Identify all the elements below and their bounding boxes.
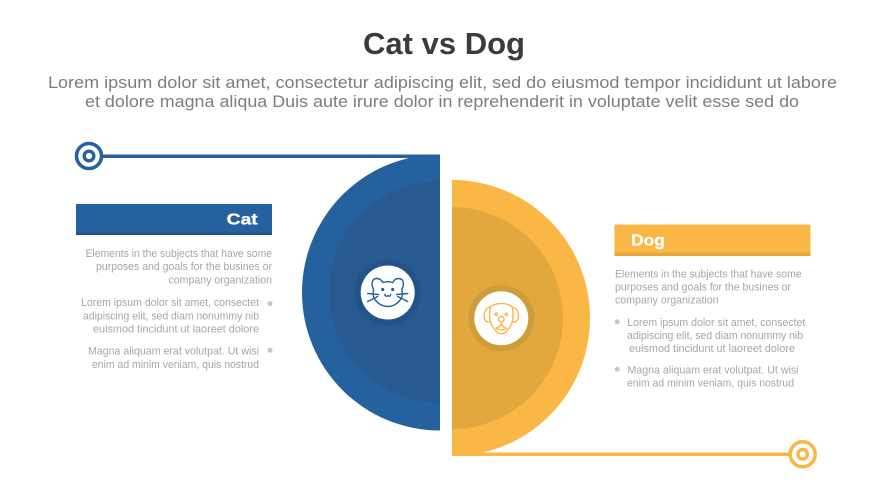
cat description: Elements in the subjects that have some: [86, 248, 272, 260]
cat description: purposes and goals for the busines or: [96, 261, 272, 273]
dog bullet 1: [615, 317, 805, 355]
dog half circle: [452, 180, 590, 456]
dog description: Elements in the subjects that have some: [615, 268, 802, 280]
cat header bar: Cat: [227, 212, 259, 228]
dog bullet 2: enim ad minim veniam, quis nostrud: [627, 378, 794, 390]
icon: cat: [355, 260, 421, 326]
cat half circle: [302, 154, 440, 430]
dog bullet 1: euismod tincidunt ut laoreet dolore: [629, 343, 795, 355]
subtitle: et dolore magna aliqua Duis aute irure dolor in reprehenderit in voluptate velit esse sed do: [85, 93, 799, 111]
dog header bar: Dog: [631, 232, 665, 250]
connector: dog line and target: [452, 442, 815, 467]
dog description: [615, 268, 802, 306]
cat bullet 2: Magna aliquam erat volutpat. Ut wisi: [88, 346, 259, 358]
connector: cat line and target: [76, 144, 440, 168]
dog description: company organization: [615, 294, 718, 306]
cat description: company organization: [168, 274, 272, 286]
cat description: [86, 248, 272, 286]
subtitle: Lorem ipsum dolor sit amet, consectetur adipiscing elit, sed do eiusmod tempor incididunt ut labore: [48, 74, 837, 92]
dog bullet 2: Magna aliquam erat volutpat. Ut wisi: [628, 364, 798, 376]
dog bullet 1: Lorem ipsum dolor sit amet, consectet: [627, 317, 805, 329]
dog bullet 1: adipiscing elit, sed diam nonummy nib: [627, 330, 803, 342]
cat bullet 1: adipiscing elit, sed diam nonummy nib: [83, 310, 259, 322]
subtitle: [48, 74, 837, 111]
dog header bar: [614, 224, 810, 256]
title: Cat vs Dog: [363, 26, 525, 61]
dog bullet 2: [615, 364, 798, 390]
icon: dog: [468, 285, 534, 351]
cat bullet 1: euismod tincidunt ut laoreet dolore: [93, 324, 259, 336]
cat bullet 2: [88, 346, 272, 371]
cat bullet 2: enim ad minim veniam, quis nostrud: [92, 359, 259, 371]
cat bullet 1: [81, 297, 272, 336]
cat bullet 1: Lorem ipsum dolor sit amet, consectet: [81, 297, 259, 309]
cat header bar: [76, 204, 272, 235]
dog description: purposes and goals for the busines or: [615, 282, 791, 294]
